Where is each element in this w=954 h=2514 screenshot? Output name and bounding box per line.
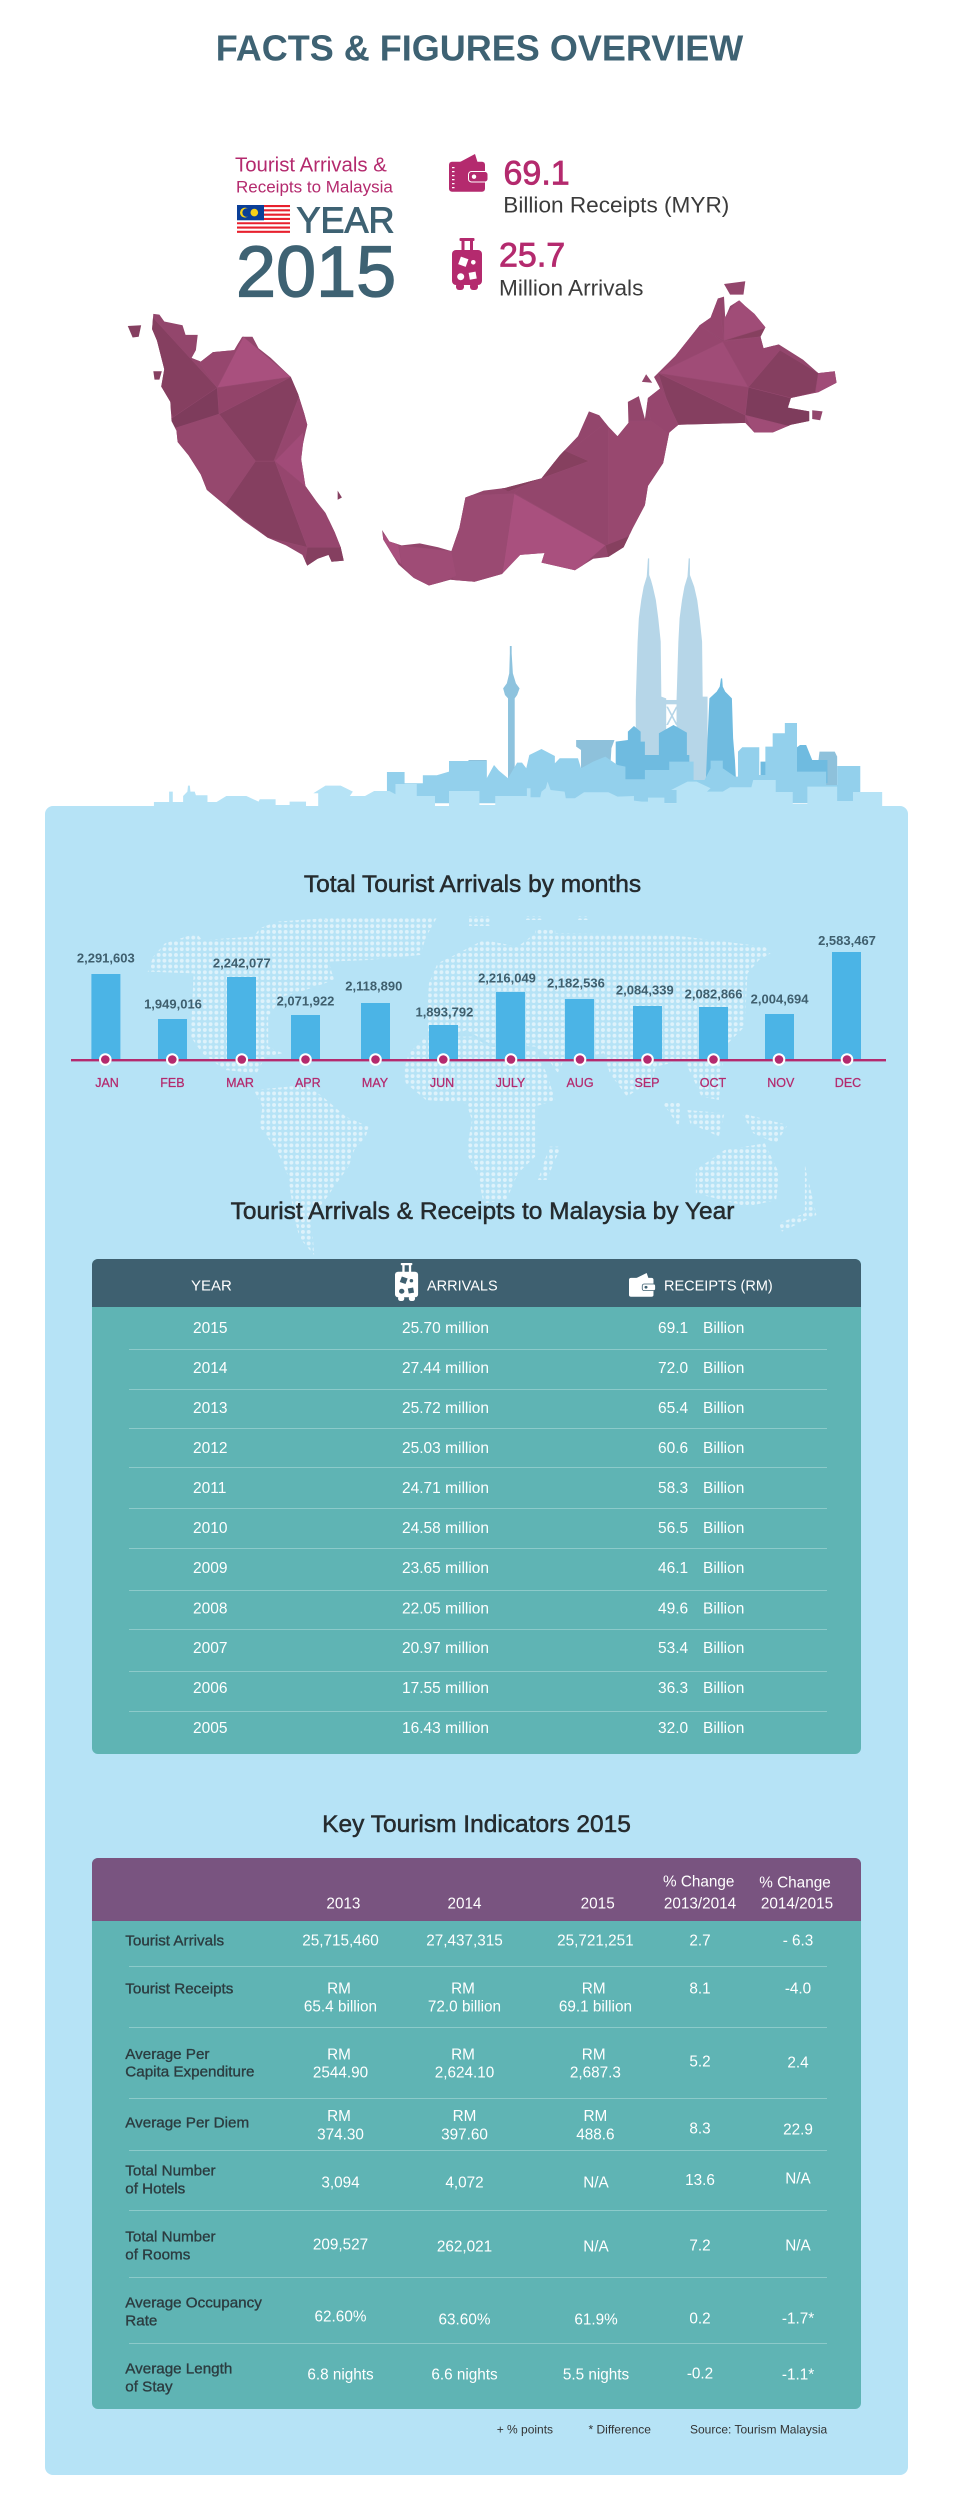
subtitle: Tourist Arrivals & bbox=[235, 155, 387, 177]
month labels: MAR bbox=[226, 1076, 254, 1090]
row 2013: Billion bbox=[703, 1400, 744, 1417]
row: average length of stay: 6.8 nights bbox=[307, 2366, 374, 2384]
value labels: 2,583,467 bbox=[818, 933, 876, 948]
month labels: DEC bbox=[835, 1076, 861, 1090]
icon: wallet bbox=[449, 154, 488, 192]
row: average occupancy rate: Rate bbox=[125, 2312, 157, 2330]
table header: YEAR bbox=[191, 1278, 232, 1294]
row: tourist receipts: 65.4 billion bbox=[304, 1998, 377, 2016]
row: total number of hotels: N/A bbox=[583, 2174, 610, 2192]
month labels: APR bbox=[295, 1076, 321, 1090]
row 2015: 69.1 bbox=[658, 1320, 688, 1337]
row 2015: 2015 bbox=[193, 1320, 227, 1337]
row 2014: 72.0 bbox=[658, 1360, 689, 1377]
row 2012 bbox=[193, 1440, 744, 1457]
table body bbox=[92, 1259, 861, 1754]
row 2015: 25.70 million bbox=[402, 1320, 489, 1337]
value labels: 1,949,016 bbox=[144, 996, 202, 1011]
row 2010: 56.5 bbox=[658, 1520, 688, 1537]
row 2009 bbox=[193, 1560, 744, 1577]
row 2011: 58.3 bbox=[658, 1480, 688, 1497]
table: key tourism indicators bbox=[92, 1858, 861, 2409]
month labels: OCT bbox=[700, 1076, 727, 1090]
icon: luggage bbox=[452, 238, 482, 290]
row 2006: 36.3 bbox=[658, 1680, 688, 1697]
row: total number of rooms bbox=[125, 2228, 812, 2264]
row 2013: 65.4 bbox=[658, 1400, 689, 1417]
row: average per diem: 8.3 bbox=[689, 2120, 711, 2138]
table header: 2013 bbox=[326, 1896, 360, 1912]
row 2008: Billion bbox=[703, 1600, 744, 1618]
row 2009: 46.1 bbox=[658, 1560, 688, 1577]
row: total number of rooms: 7.2 bbox=[689, 2238, 711, 2254]
row 2011: Billion bbox=[703, 1480, 744, 1497]
KL Tower bbox=[503, 646, 520, 777]
row: average per diem: 397.60 bbox=[441, 2126, 488, 2144]
arrivals label: Million Arrivals bbox=[499, 275, 643, 300]
row: total number of hotels: N/A bbox=[785, 2170, 812, 2188]
bar chart: monthly arrivals bbox=[71, 933, 886, 1090]
row: total number of rooms: N/A bbox=[583, 2238, 610, 2256]
value labels: 2,004,694 bbox=[751, 992, 809, 1007]
table header: 2015 bbox=[581, 1896, 615, 1912]
row: average length of stay: Average Length bbox=[125, 2360, 232, 2378]
row: average per diem: 374.30 bbox=[317, 2126, 364, 2144]
receipts label: Billion Receipts (MYR) bbox=[503, 193, 729, 218]
row: average per capita expenditure: 2,687.3 bbox=[570, 2064, 621, 2082]
subtitle: Receipts to Malaysia bbox=[236, 177, 393, 196]
row: tourist receipts: 8.1 bbox=[689, 1980, 711, 1998]
row 2005: 16.43 million bbox=[402, 1720, 489, 1737]
panel: light blue background bbox=[45, 806, 908, 2475]
row: average per diem: RM bbox=[584, 2108, 607, 2125]
row: average length of stay: of Stay bbox=[125, 2378, 173, 2396]
row 2008: 22.05 million bbox=[402, 1600, 489, 1618]
axis markers bbox=[100, 1054, 852, 1065]
row 2008: 2008 bbox=[193, 1600, 227, 1618]
row: tourist arrivals: Tourist Arrivals bbox=[125, 1932, 224, 1950]
row: total number of hotels: 4,072 bbox=[445, 2174, 484, 2192]
axis line bbox=[71, 1059, 886, 1061]
table header: ARRIVALS bbox=[427, 1278, 498, 1294]
table header: % Change bbox=[663, 1874, 734, 1890]
row 2014: 27.44 million bbox=[402, 1360, 489, 1377]
row: average per capita expenditure: 2.4 bbox=[787, 2054, 809, 2072]
row 2006: 2006 bbox=[193, 1680, 227, 1697]
footnotes: * Difference bbox=[588, 2422, 651, 2436]
row 2007 bbox=[193, 1640, 744, 1657]
row: total number of hotels: of Hotels bbox=[125, 2180, 186, 2198]
row: tourist receipts: 72.0 billion bbox=[428, 1998, 501, 2016]
row: average length of stay: -1.1* bbox=[782, 2366, 814, 2384]
islands bbox=[128, 325, 342, 500]
row: total number of hotels bbox=[125, 2162, 812, 2198]
table body bbox=[92, 1858, 861, 2409]
row: total number of hotels: 3,094 bbox=[321, 2174, 360, 2192]
row 2013 bbox=[193, 1400, 744, 1417]
heading: key indicators: Key Tourism Indicators 2015 bbox=[322, 1811, 631, 1838]
receipts value: 69.1 bbox=[504, 154, 570, 192]
row 2008 bbox=[193, 1600, 744, 1618]
row: tourist arrivals bbox=[125, 1932, 813, 1950]
value labels: 2,182,536 bbox=[547, 975, 605, 990]
year block bbox=[235, 155, 396, 313]
table header: RECEIPTS (RM) bbox=[664, 1278, 773, 1294]
row: tourist arrivals: - 6.3 bbox=[783, 1932, 813, 1950]
month labels: FEB bbox=[160, 1076, 185, 1090]
row: average per capita expenditure: Capita Expenditure bbox=[125, 2064, 254, 2080]
row 2013: 2013 bbox=[193, 1400, 227, 1417]
row: average occupancy rate: 0.2 bbox=[689, 2310, 711, 2328]
icon: Malaysian flag bbox=[237, 205, 290, 235]
row 2009: 2009 bbox=[193, 1560, 227, 1577]
row 2014 bbox=[193, 1360, 744, 1377]
row 2006: 17.55 million bbox=[402, 1680, 489, 1697]
month labels: AUG bbox=[566, 1076, 594, 1090]
row 2010: Billion bbox=[703, 1520, 744, 1537]
row 2010: 24.58 million bbox=[402, 1520, 489, 1537]
row: average per diem: RM bbox=[453, 2108, 476, 2125]
row 2012: 60.6 bbox=[658, 1440, 688, 1457]
row 2007: 53.4 bbox=[658, 1640, 689, 1657]
value labels: 2,242,077 bbox=[213, 955, 271, 970]
title: FACTS & FIGURES OVERVIEW bbox=[216, 28, 743, 68]
row: average occupancy rate: -1.7* bbox=[782, 2310, 814, 2328]
table header: % Change bbox=[759, 1874, 831, 1892]
row 2007: 2007 bbox=[193, 1640, 227, 1657]
month labels bbox=[95, 1076, 861, 1090]
value labels: 2,084,339 bbox=[616, 982, 674, 997]
row: tourist receipts bbox=[125, 1980, 811, 2016]
islands bbox=[642, 281, 823, 420]
row 2015 bbox=[193, 1320, 744, 1337]
row: total number of hotels: 13.6 bbox=[685, 2172, 715, 2189]
row: tourist arrivals: 25,715,460 bbox=[302, 1932, 379, 1950]
row 2009: 23.65 million bbox=[402, 1560, 489, 1577]
month labels: NOV bbox=[767, 1076, 795, 1090]
row: average length of stay: -0.2 bbox=[687, 2366, 713, 2382]
row: average per capita expenditure: RM bbox=[451, 2046, 475, 2064]
row: tourist arrivals: 2.7 bbox=[689, 1932, 711, 1950]
skyline bbox=[154, 558, 882, 808]
row 2011: 24.71 million bbox=[402, 1480, 489, 1497]
month labels: JUN bbox=[430, 1076, 454, 1090]
map: Peninsular Malaysia bbox=[128, 314, 344, 566]
row: average per capita expenditure: RM bbox=[327, 2046, 351, 2064]
row: average occupancy rate: 61.9% bbox=[574, 2312, 618, 2328]
row 2014: 2014 bbox=[193, 1360, 228, 1377]
row: average per capita expenditure: Average Per bbox=[125, 2046, 209, 2063]
row 2011 bbox=[193, 1480, 744, 1497]
row: average occupancy rate bbox=[125, 2294, 814, 2330]
row: average length of stay: 6.6 nights bbox=[431, 2366, 498, 2384]
row 2005: Billion bbox=[703, 1720, 744, 1737]
row: total number of rooms: of Rooms bbox=[125, 2246, 191, 2264]
row 2012: Billion bbox=[703, 1440, 744, 1457]
row 2015: Billion bbox=[703, 1320, 744, 1337]
table header: 2014/2015 bbox=[761, 1896, 833, 1912]
row 2014: Billion bbox=[703, 1360, 744, 1377]
row: average per capita expenditure: 2,624.10 bbox=[435, 2064, 494, 2082]
row: average occupancy rate: 63.60% bbox=[439, 2312, 491, 2328]
value labels: 2,071,922 bbox=[277, 993, 334, 1008]
row: average per diem: 488.6 bbox=[576, 2126, 615, 2144]
stat: receipts bbox=[449, 154, 729, 218]
year value: 2015 bbox=[236, 233, 396, 313]
row 2006 bbox=[193, 1680, 744, 1697]
row: average per capita expenditure: 5.2 bbox=[689, 2054, 711, 2070]
row: total number of rooms: 262,021 bbox=[437, 2238, 492, 2256]
month labels: JAN bbox=[95, 1076, 119, 1090]
footnotes bbox=[497, 2422, 827, 2436]
value labels: 2,216,049 bbox=[478, 970, 536, 985]
row: tourist receipts: RM bbox=[582, 1980, 606, 1998]
row 2005: 32.0 bbox=[658, 1720, 689, 1737]
value labels: 2,118,890 bbox=[345, 978, 402, 993]
value labels: 2,291,603 bbox=[77, 950, 135, 965]
light-blue buildings bbox=[387, 723, 860, 803]
row: average occupancy rate: 62.60% bbox=[315, 2308, 367, 2326]
row 2009: Billion bbox=[703, 1560, 744, 1577]
row: tourist receipts: 69.1 billion bbox=[559, 1998, 632, 2016]
row: average length of stay bbox=[125, 2360, 814, 2396]
value labels: 1,893,792 bbox=[415, 1004, 473, 1019]
table header bbox=[92, 1858, 861, 1921]
row: tourist arrivals: 27,437,315 bbox=[426, 1932, 503, 1950]
row 2006: Billion bbox=[703, 1680, 744, 1697]
row: total number of rooms: Total Number bbox=[125, 2228, 216, 2246]
row: tourist receipts: RM bbox=[451, 1980, 475, 1998]
row: tourist receipts: RM bbox=[327, 1980, 351, 1998]
table header: 2013/2014 bbox=[664, 1896, 737, 1912]
row: average per diem: 22.9 bbox=[783, 2122, 813, 2138]
row: tourist receipts: -4.0 bbox=[785, 1980, 811, 1998]
row 2007: Billion bbox=[703, 1640, 744, 1657]
Petronas towers bbox=[636, 558, 708, 783]
row 2010: 2010 bbox=[193, 1520, 228, 1537]
row: tourist receipts: Tourist Receipts bbox=[125, 1980, 234, 1998]
mid-blue buildings bbox=[468, 740, 837, 787]
value labels bbox=[77, 933, 876, 1019]
month labels: MAY bbox=[362, 1076, 389, 1090]
row: total number of hotels: Total Number bbox=[125, 2162, 216, 2180]
month labels: JULY bbox=[496, 1076, 526, 1090]
heading: yearly arrivals and receipts: Tourist Arrivals & Receipts to Malaysia by Year bbox=[231, 1198, 734, 1225]
heading: monthly arrivals: Total Tourist Arrivals by months bbox=[304, 871, 641, 898]
row 2005 bbox=[193, 1720, 744, 1737]
front buildings bbox=[154, 780, 882, 808]
footnotes: + % points bbox=[497, 2422, 553, 2436]
icon: luggage bbox=[395, 1263, 418, 1301]
row 2013: 25.72 million bbox=[402, 1400, 489, 1417]
row 2007: 20.97 million bbox=[402, 1640, 489, 1657]
row: average per capita expenditure bbox=[125, 2046, 809, 2082]
row: total number of rooms: N/A bbox=[785, 2238, 812, 2254]
value labels: 2,082,866 bbox=[685, 986, 743, 1001]
table: arrivals and receipts by year bbox=[92, 1259, 861, 1754]
row: average per diem: Average Per Diem bbox=[125, 2114, 249, 2132]
month labels: SEP bbox=[634, 1076, 660, 1090]
footnotes: Source: Tourism Malaysia bbox=[690, 2422, 827, 2436]
year label: YEAR bbox=[296, 200, 395, 241]
subtitle bbox=[235, 155, 393, 196]
table header bbox=[92, 1259, 861, 1307]
row: average per capita expenditure: RM bbox=[582, 2046, 606, 2064]
row: total number of rooms: 209,527 bbox=[313, 2236, 368, 2254]
icon: wallet bbox=[629, 1273, 656, 1297]
stat: arrivals bbox=[452, 237, 643, 300]
row 2010 bbox=[193, 1520, 744, 1537]
arrivals value: 25.7 bbox=[499, 237, 565, 275]
world dot map bbox=[140, 900, 820, 1260]
row 2008: 49.6 bbox=[658, 1600, 688, 1618]
map: East Malaysia bbox=[377, 281, 846, 589]
row 2012: 25.03 million bbox=[402, 1440, 489, 1457]
row: average per diem bbox=[125, 2108, 813, 2144]
row 2012: 2012 bbox=[193, 1440, 227, 1457]
row: average per diem: RM bbox=[327, 2108, 351, 2125]
row: average length of stay: 5.5 nights bbox=[563, 2366, 630, 2384]
row: average occupancy rate: Average Occupancy bbox=[125, 2294, 262, 2312]
row: average per capita expenditure: 2544.90 bbox=[313, 2064, 368, 2082]
table header: 2014 bbox=[447, 1896, 482, 1912]
bars bbox=[91, 952, 861, 1060]
row: tourist arrivals: 25,721,251 bbox=[557, 1932, 634, 1950]
row 2011: 2011 bbox=[193, 1480, 226, 1497]
row 2005: 2005 bbox=[193, 1720, 227, 1737]
